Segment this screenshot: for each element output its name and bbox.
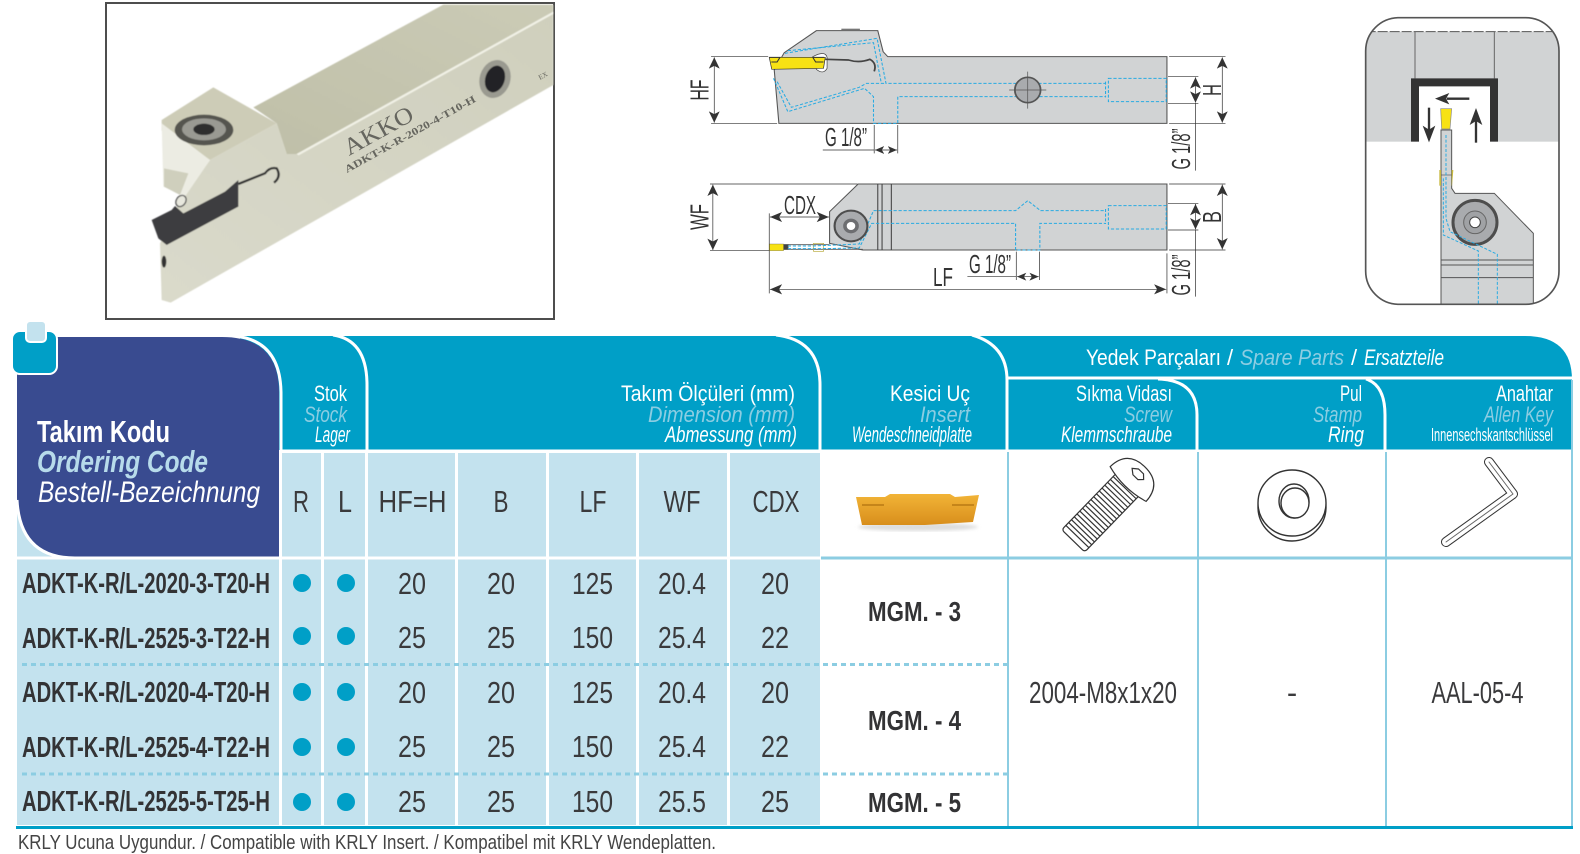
row 1: 20.4 — [658, 566, 706, 601]
photo engraving text — [339, 70, 549, 176]
icon: screw — [1055, 449, 1163, 558]
dimension labels: B — [1197, 211, 1227, 223]
dimension labels: G 1/8” — [969, 249, 1011, 279]
dimension labels: WF — [684, 204, 714, 230]
row 2: 25 — [398, 620, 426, 655]
header: stamp: Stamp — [1313, 402, 1362, 427]
row 1: 20 — [761, 566, 789, 601]
row 2: 25 — [487, 620, 515, 655]
header: stock — [304, 381, 351, 447]
insert codes: MGM. - 5 — [868, 787, 961, 818]
header: spare parts: Spare Parts — [1240, 345, 1344, 370]
row 4: 150 — [572, 729, 613, 764]
header: screw: Klemmschraube — [1061, 422, 1172, 447]
row 4: 22 — [761, 729, 789, 764]
row 1: ADKT-K-R/L-2020-3-T20-H — [22, 568, 270, 600]
table — [12, 321, 1573, 829]
photo: tool holder — [106, 3, 554, 319]
dimension labels — [684, 80, 1227, 296]
row 3: 20 — [487, 675, 515, 710]
row 1 — [22, 566, 789, 601]
row 1: 20 — [398, 566, 426, 601]
bottom rule — [16, 826, 1573, 829]
row 5: ADKT-K-R/L-2525-5-T25-H — [22, 786, 270, 818]
header: allen key — [1431, 381, 1554, 445]
row 5 — [22, 784, 789, 819]
row 2: 25.4 — [658, 620, 706, 655]
header: insert: Insert — [920, 402, 971, 427]
side view body — [769, 184, 1167, 251]
footnote: KRLY Ucuna Uygundur. / Compatible with KRLY Insert. / Kompatibel mit KRLY Wendeplatten. — [18, 832, 716, 854]
icon: washer — [1258, 470, 1326, 541]
column headers — [293, 484, 800, 519]
row 2: 22 — [761, 620, 789, 655]
dimension labels: G 1/8” — [1166, 128, 1196, 170]
row 5: 150 — [572, 784, 613, 819]
column headers: CDX — [752, 484, 800, 519]
dimension labels: HF — [684, 80, 714, 100]
header: stamp: Ring — [1328, 422, 1365, 447]
header: dimension: Dimension (mm) — [648, 402, 795, 427]
row 5: 25 — [761, 784, 789, 819]
header: dimension — [621, 381, 797, 447]
row 2: 150 — [572, 620, 613, 655]
column headers: R — [293, 484, 309, 519]
dimension labels: G 1/8” — [825, 122, 867, 152]
header: screw: Sıkma Vidası — [1076, 381, 1172, 406]
spare part codes — [1029, 675, 1524, 710]
column headers: B — [494, 484, 508, 519]
row 3: 20.4 — [658, 675, 706, 710]
row 3 — [22, 675, 789, 710]
row 5: 25 — [398, 784, 426, 819]
dimension labels: G 1/8” — [1166, 254, 1196, 296]
header: spare parts: / — [1227, 345, 1234, 370]
row 5: 25 — [487, 784, 515, 819]
header: screw: Screw — [1124, 402, 1174, 427]
icon: insert — [856, 494, 979, 531]
side view dimensions — [710, 184, 1225, 297]
column headers: HF=H — [378, 484, 446, 519]
header: screw — [1061, 381, 1174, 447]
row 2 — [22, 620, 789, 655]
row 4: 25 — [398, 729, 426, 764]
row 4: ADKT-K-R/L-2525-4-T22-H — [22, 732, 270, 764]
header: spare parts: Yedek Parçaları — [1086, 345, 1221, 370]
photo engraving text: AKKO — [339, 102, 418, 161]
panel: ordering code — [17, 337, 279, 558]
top view body — [769, 29, 1167, 123]
row 5: 25.5 — [658, 784, 706, 819]
panel: ordering code: Bestell-Bezeichnung — [38, 476, 260, 509]
insert codes: MGM. - 4 — [868, 705, 961, 736]
row 3: 125 — [572, 675, 613, 710]
row 4: 25 — [487, 729, 515, 764]
panel: ordering code: Takım Kodu — [37, 414, 170, 449]
dimension labels: H — [1197, 84, 1227, 96]
row 1: 125 — [572, 566, 613, 601]
diagram: machining direction panel — [1366, 18, 1559, 304]
insert codes — [868, 596, 961, 818]
spare part codes: - — [1287, 675, 1297, 710]
photo engraving text: EX — [537, 70, 549, 82]
header: stock: Stock — [304, 402, 348, 427]
column headers: LF — [580, 484, 606, 519]
header: insert: Wendeschneidplatte — [852, 422, 972, 447]
photo engraving text: ADKT-K-R-2020-4-T10-H — [343, 94, 478, 176]
header: allen key: Anahtar — [1496, 381, 1553, 406]
header: spare parts — [1086, 345, 1444, 370]
row 3: 20 — [398, 675, 426, 710]
icon: allen key — [1446, 462, 1513, 542]
row 4: 25.4 — [658, 729, 706, 764]
row 1: 20 — [487, 566, 515, 601]
insert codes: MGM. - 3 — [868, 596, 961, 627]
row 3: ADKT-K-R/L-2020-4-T20-H — [22, 677, 270, 709]
header: stamp — [1313, 381, 1365, 447]
panel: ordering code: Ordering Code — [37, 444, 208, 479]
header: dimension: Takım Ölçüleri (mm) — [621, 381, 795, 406]
dimension labels: LF — [933, 262, 953, 292]
dimension labels: CDX — [784, 190, 816, 220]
icon: tab — [12, 321, 57, 374]
row 2: ADKT-K-R/L-2525-3-T22-H — [22, 623, 270, 655]
header: stock: Stok — [314, 381, 348, 406]
spare part codes: 2004-M8x1x20 — [1029, 675, 1177, 710]
header separators — [234, 335, 1573, 451]
header: allen key: Allen Key — [1483, 402, 1554, 427]
header: insert — [852, 381, 972, 447]
row dividers — [22, 664, 1007, 774]
top view dimensions — [711, 57, 1225, 171]
light cell backgrounds — [17, 453, 820, 825]
right column grid — [821, 380, 1573, 826]
header: dimension: Abmessung (mm) — [663, 422, 797, 447]
row 4 — [22, 729, 789, 764]
header: stamp: Pul — [1340, 381, 1362, 406]
table header band — [240, 336, 1572, 450]
header: insert: Kesici Uç — [890, 381, 970, 406]
spare part codes: AAL-05-4 — [1432, 675, 1524, 710]
row 3: 20 — [761, 675, 789, 710]
header: spare parts: / — [1351, 345, 1358, 370]
column headers: L — [338, 484, 352, 519]
column headers: WF — [664, 484, 700, 519]
diagram: tool top and side views — [684, 29, 1227, 297]
header: spare parts: Ersatzteile — [1364, 345, 1444, 370]
header: stock: Lager — [315, 422, 351, 447]
